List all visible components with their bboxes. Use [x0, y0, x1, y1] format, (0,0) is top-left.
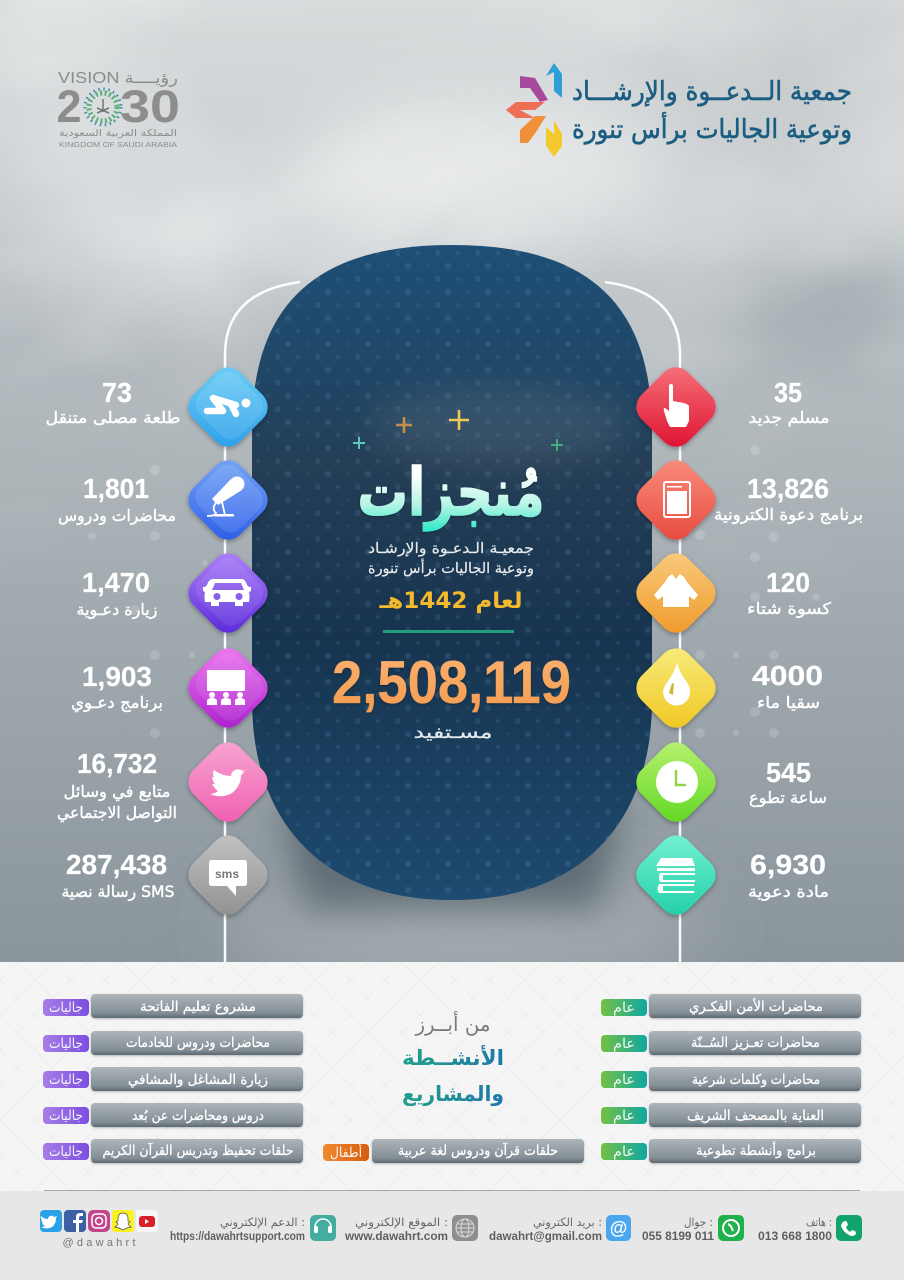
heading: top activities: الأنشــطة: [402, 1044, 504, 1070]
stat: winter clothing: كسوة شتاء: [747, 599, 831, 619]
contact: website: الموقع الإلكتروني :: [355, 1215, 448, 1230]
contact: website: [344, 1215, 478, 1243]
stat: new muslims: مسلم جديد: [748, 408, 830, 427]
sparkles: [353, 410, 563, 451]
stat: electronic programs: 13,826: [747, 473, 829, 504]
item: intellectual security: محاضرات الأمن الفكـري: [689, 998, 823, 1015]
stat: lectures: 1,801: [83, 473, 149, 504]
stat: social followers: [57, 735, 275, 829]
contact: phone: 013 668 1800: [758, 1231, 832, 1243]
contact: phone: [758, 1215, 862, 1243]
stat: prayer trips: طلعة مصلى متنقل: [46, 408, 180, 427]
stat: programs: [71, 641, 275, 735]
association name: جمعية الــدعــوة والإرشـــاد: [572, 77, 852, 107]
stat: prayer trips: [46, 360, 275, 454]
logo: Dawah association: [506, 63, 852, 157]
decorative bubbles: [88, 445, 820, 738]
icon: books: [629, 828, 723, 922]
item: children Quran circles: أطفال: [330, 1143, 362, 1161]
item: lectures for housemaids: [43, 1031, 303, 1055]
item: sharia talks: [601, 1067, 861, 1091]
contact: support: الدعم الإلكتروني :: [220, 1215, 305, 1230]
icon: clock: [629, 735, 723, 829]
item: Quran memorization circles: حلقات تحفيظ وتدريس القرآن الكريم: [102, 1142, 294, 1159]
stat: dawah materials: مادة دعوية: [748, 882, 829, 902]
stat: water: [629, 641, 823, 735]
contact: support: https://dawahrtsupport.com: [170, 1231, 305, 1243]
stat: programs: برنامج دعـوي: [71, 693, 163, 713]
item: care for the mushaf: العناية بالمصحف الشريف: [687, 1108, 824, 1124]
stat: SMS: رسالة نصية SMS: [62, 882, 174, 902]
divider: [383, 630, 514, 633]
contact: email: [489, 1215, 631, 1243]
stat: volunteer hours: ساعة تطوع: [749, 788, 827, 808]
item: lectures for housemaids: جاليات: [49, 1036, 83, 1052]
stat: visits: زيارة دعـوية: [76, 600, 158, 620]
association name: [572, 77, 852, 145]
panel: footer contacts: [0, 1190, 904, 1280]
item: care for the mushaf: [601, 1103, 861, 1127]
logo: Vision 2030: 2: [56, 81, 82, 132]
stat: prayer trips: 73: [102, 377, 132, 408]
item: Quran memorization circles: [43, 1139, 303, 1163]
stat: SMS: [62, 828, 275, 922]
item: workshops and hospitals visits: [43, 1067, 303, 1091]
pill shadow: [282, 800, 622, 910]
contact: email: dawahrt@gmail.com: [489, 1231, 602, 1243]
logo: Vision 2030: VISION رؤيــــة: [58, 70, 178, 88]
panel: central pill: [252, 245, 652, 900]
item: promoting sunnah: عام: [613, 1036, 635, 1052]
heading: top activities: والمشاريع: [402, 1082, 504, 1106]
social icons: [40, 1210, 158, 1249]
item: intellectual security: عام: [613, 1000, 635, 1016]
item: lectures for housemaids: محاضرات ودروس للخادمات: [126, 1035, 270, 1051]
icon: audience and screen: [181, 641, 275, 735]
logo: Vision 2030: 30: [120, 81, 180, 132]
stat: visits: 1,470: [82, 567, 150, 598]
item: promoting sunnah: [601, 1031, 861, 1055]
stat: volunteer hours: 545: [766, 757, 811, 788]
beneficiaries label: مسـتفيد: [414, 723, 492, 743]
subtitle: [368, 541, 534, 577]
icon: SMS bubble: [181, 828, 275, 922]
year: لعام 1442هـ: [378, 589, 522, 614]
icon: device: [629, 453, 723, 547]
item: intellectual security: [601, 994, 861, 1018]
contact: mobile: جوال :: [684, 1215, 713, 1230]
item: care for the mushaf: عام: [613, 1108, 635, 1124]
contact: email: @: [610, 1218, 627, 1238]
item: voluntary programs: برامج وأنشطة تطوعية: [696, 1141, 816, 1159]
icon: star logo: [506, 63, 562, 157]
stat: water: سقيا ماء: [757, 693, 820, 712]
item: workshops and hospitals visits: زيارة المشاغل والمشافي: [128, 1072, 268, 1088]
stat: social followers: متابع في وسائل: [64, 782, 170, 802]
item: sharia talks: عام: [613, 1072, 635, 1088]
item: remote lessons: دروس ومحاضرات عن بُعد: [132, 1108, 264, 1124]
contact: mobile: 055 8199 011: [642, 1231, 715, 1243]
stat: new muslims: [629, 360, 830, 454]
stat: visits: [76, 546, 275, 640]
total beneficiaries number: 2,508,119: [332, 649, 571, 716]
stat: social followers: 16,732: [77, 748, 157, 779]
stat: SMS: 287,438: [66, 849, 167, 880]
background: cloudy sky: [0, 0, 904, 970]
item: Fatiha project: مشروع تعليم الفاتحة: [140, 999, 256, 1015]
item: Fatiha project: جاليات: [49, 1000, 83, 1016]
icon: raised finger: [629, 360, 723, 454]
item: voluntary programs: [601, 1139, 861, 1163]
subtitle: جمعيـة الـدعـوة والإرشـاد: [368, 541, 534, 557]
stat: dawah materials: [629, 828, 829, 922]
association name: وتوعية الجاليات برأس تنورة: [572, 111, 852, 145]
heading: top activities: من أبــرز: [415, 1011, 490, 1036]
item: Quran memorization circles: جاليات: [49, 1144, 83, 1160]
connector line: right: [605, 282, 680, 962]
stat: water: 4000: [752, 660, 823, 691]
logo: Vision 2030: [56, 70, 180, 149]
icon: twitter bird: [181, 735, 275, 829]
contact: website: www.dawahrt.com: [344, 1231, 448, 1243]
contact: mobile: [642, 1215, 744, 1243]
stat: winter clothing: [629, 546, 831, 640]
main title: مُنجزات: [358, 454, 544, 531]
contact: phone: هاتف :: [806, 1215, 832, 1229]
icon: microphone: [181, 453, 275, 547]
icon: prayer: [181, 360, 275, 454]
item: remote lessons: جاليات: [49, 1108, 83, 1124]
icon: water drop: [629, 641, 723, 735]
stat: electronic programs: برنامج دعوة الكترونية: [714, 505, 863, 525]
item: remote lessons: [43, 1103, 303, 1127]
item: workshops and hospitals visits: جاليات: [49, 1072, 83, 1088]
social icons: @dawahrt: [62, 1237, 136, 1249]
stat: winter clothing: 120: [766, 567, 810, 598]
item: children Quran circles: [323, 1139, 584, 1163]
stat: lectures: محاضرات ودروس: [58, 506, 176, 526]
icon: coat: [629, 546, 723, 640]
contact: email: بريد الكتروني :: [533, 1215, 602, 1230]
subtitle: وتوعية الجاليات برأس تنورة: [368, 558, 534, 577]
icon: 2030 emblem: [85, 89, 121, 125]
item: Fatiha project: [43, 994, 303, 1018]
icon: SMS bubble: sms: [215, 867, 239, 881]
stat: social followers: التواصل الاجتماعي: [57, 803, 177, 823]
stat: programs: 1,903: [82, 661, 152, 692]
icon: car: [181, 546, 275, 640]
logo: Vision 2030: المملكة العربية السعودية: [59, 128, 177, 139]
stat: lectures: [58, 453, 275, 547]
contact: support: [170, 1215, 336, 1243]
stat: new muslims: 35: [774, 377, 802, 408]
item: voluntary programs: عام: [613, 1144, 635, 1160]
heading: top activities: [402, 1011, 504, 1106]
stat: volunteer hours: [629, 735, 827, 829]
connector line: left: [225, 282, 300, 962]
item: sharia talks: محاضرات وكلمات شرعية: [692, 1072, 820, 1088]
stat: electronic programs: [629, 453, 863, 547]
item: promoting sunnah: محاضرات تعـزيز السُــنّة: [691, 1035, 820, 1051]
item: children Quran circles: حلقات قرآن ودروس لغة عربية: [398, 1142, 558, 1159]
logo: Vision 2030: KINGDOM OF SAUDI ARABIA: [59, 140, 177, 149]
stat: dawah materials: 6,930: [750, 849, 826, 880]
panel: activities and projects: [0, 962, 904, 1191]
